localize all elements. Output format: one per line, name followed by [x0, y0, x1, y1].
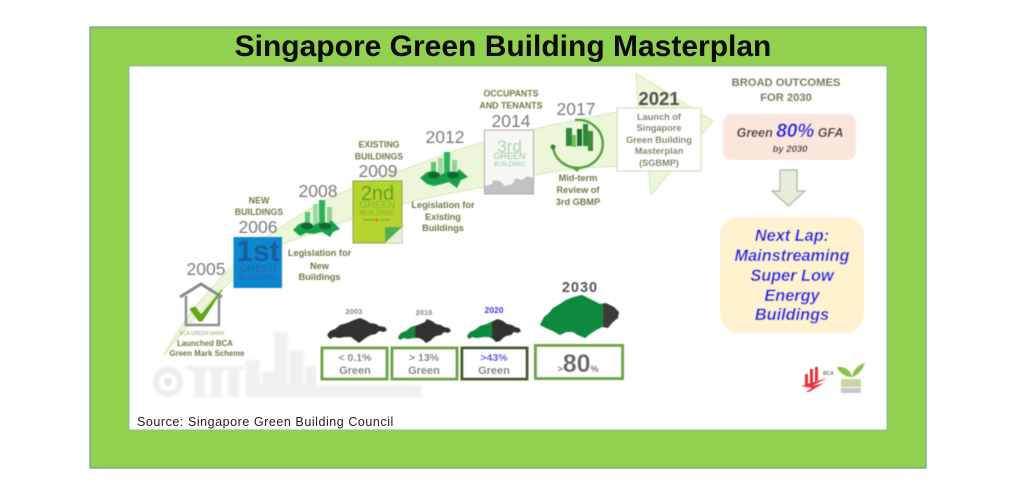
milestone 2006: new buildings: BUILDINGS: [235, 207, 283, 217]
label box < 0.1%: [322, 348, 387, 379]
milestone 2012: legislation for existing buildings: [411, 127, 475, 233]
milestone 2009: existing buildings: EXISTING: [358, 140, 400, 150]
icon: circular green city: [550, 120, 603, 172]
icon: 2nd green building masterplan cover: BUILDING: [360, 208, 395, 217]
icon: green city cluster: [293, 200, 340, 237]
icon: green city cluster: [420, 152, 468, 188]
map 2010: [392, 308, 457, 379]
title: Singapore Green Building Masterplan: [235, 30, 771, 63]
icon: 3rd green building masterplan cover: [484, 130, 534, 194]
milestone 2005: BCA Green Mark: 2005: [187, 259, 225, 279]
milestone 2009: existing buildings: [353, 140, 403, 243]
heading: broad outcomes: FOR 2030: [760, 92, 812, 104]
callout: green 80% GFA: Green 80% GFA: [737, 121, 843, 142]
milestone 2012: legislation for existing buildings: Existing: [425, 212, 461, 222]
icon: green mark house: [180, 284, 222, 325]
map 2003: 2003: [346, 307, 362, 316]
heading: broad outcomes: [732, 77, 841, 104]
broad outcomes panel: [720, 77, 864, 333]
timeline arrow band: [163, 73, 713, 356]
icon: 3rd green building masterplan cover: BUILDING: [494, 161, 525, 168]
map 2020: [462, 305, 527, 379]
callout: next lap: Mainstreaming: [735, 247, 850, 265]
callout: next lap: Buildings: [755, 306, 829, 324]
milestone 2017: mid-term review: Mid-term: [559, 173, 597, 183]
milestone 2006: new buildings: [234, 196, 283, 288]
milestone 2005: BCA Green Mark: Launched BCA: [177, 339, 233, 348]
milestone 2017: mid-term review: 3rd GBMP: [556, 197, 600, 207]
milestone 2012: legislation for existing buildings: 2012: [426, 127, 464, 147]
milestone 2005: BCA Green Mark: Green Mark Scheme: [170, 349, 245, 358]
icon: 1st green building masterplan cover: GREEN: [239, 263, 277, 275]
milestone 2012: legislation for existing buildings: Buildings: [422, 223, 464, 233]
callout: launch box: Green Building: [626, 135, 692, 145]
icon: 3rd green building masterplan cover: GREEN: [493, 151, 526, 161]
callout: launch box: Launch of: [637, 112, 682, 122]
icon: 1st green building masterplan cover: BUILDING: [239, 273, 277, 282]
milestone 2008: legislation for new buildings: Legislation for: [288, 248, 352, 258]
icon: 2nd green building masterplan cover: 2nd: [361, 183, 394, 205]
callout: green 80% GFA: by 2030: [773, 144, 808, 155]
heading: broad outcomes: BROAD OUTCOMES: [732, 77, 841, 89]
arrow: down: [772, 170, 805, 206]
milestone 2009: existing buildings: 2009: [359, 161, 397, 181]
icon: 2nd green building masterplan cover: [353, 181, 402, 243]
label box < 0.1%: Green: [339, 365, 371, 377]
callout: next lap: [720, 217, 864, 333]
icon: 3rd green building masterplan cover: 3rd: [497, 137, 522, 156]
label box > 13%: > 13%: [409, 352, 440, 364]
callout: next lap: Next Lap:: [755, 227, 829, 245]
skyline watermark: [156, 332, 421, 397]
green frame: [90, 27, 926, 468]
milestone 2008: legislation for new buildings: 2008: [299, 181, 337, 201]
icon: 1st green building masterplan cover: 1st: [236, 235, 280, 268]
milestone 2006: new buildings: 2006: [239, 217, 277, 237]
callout: launch box: (SGBMP): [639, 158, 679, 168]
milestone 2014: occupants and tenants: 2014: [492, 111, 531, 131]
milestone 2008: legislation for new buildings: Buildings: [299, 272, 340, 282]
map 2003: [322, 307, 387, 379]
milestone 2021: launch of SGBMP: [617, 88, 701, 171]
label box >80%: >80%: [557, 350, 599, 378]
label box > 13%: Green: [408, 365, 440, 377]
logos: BCA and green building: [801, 363, 865, 393]
icon: leaf logo: [837, 363, 865, 393]
icon: 2nd green building masterplan cover: GREEN: [360, 200, 395, 211]
callout: next lap: Energy: [764, 287, 821, 305]
map 2030: [536, 280, 622, 378]
milestone 2008: legislation for new buildings: New: [310, 261, 330, 271]
milestone 2021: launch of SGBMP: 2021: [638, 88, 680, 109]
milestone 2009: existing buildings: BUILDINGS: [355, 152, 403, 162]
callout: launch box: [617, 108, 701, 171]
logos: BCA and green building: BCA: [823, 371, 834, 377]
milestone 2008: legislation for new buildings: [288, 181, 352, 282]
milestone 2014: occupants and tenants: AND TENANTS: [479, 100, 543, 110]
callout: launch box: Masterplan: [635, 146, 684, 156]
callout: green 80% GFA: [723, 114, 856, 160]
icon: BCA logo: [801, 367, 827, 392]
map 2030: 2030: [562, 280, 598, 296]
icon: 1st green building masterplan cover: [234, 235, 282, 288]
callout: next lap: Super Low: [750, 267, 835, 285]
milestone 2012: legislation for existing buildings: Legislation for: [411, 200, 475, 210]
milestone 2014: occupants and tenants: OCCUPANTS: [483, 88, 539, 98]
milestone 2014: occupants and tenants: [479, 88, 543, 194]
milestone 2005: BCA Green Mark: [170, 259, 245, 358]
source note: Source: Singapore Green Building Council: [137, 415, 394, 429]
map 2020: 2020: [485, 305, 504, 315]
label box >43%: Green: [478, 365, 510, 377]
milestone 2017: mid-term review: Review of: [557, 185, 600, 195]
milestone 2006: new buildings: NEW: [249, 196, 270, 206]
map 2010: 2010: [416, 308, 432, 317]
milestone 2017: mid-term review: [550, 99, 603, 207]
maps and green percentages: [322, 280, 622, 379]
label box >43%: >43%: [480, 352, 508, 364]
label box >43%: [462, 348, 527, 379]
callout: launch box: Singapore: [637, 123, 681, 133]
label box > 13%: [392, 348, 457, 379]
white content panel: [129, 66, 887, 430]
milestone 2005: BCA Green Mark: BCA GREEN MARK: [179, 331, 225, 337]
milestone 2017: mid-term review: 2017: [557, 99, 595, 119]
label box < 0.1%: < 0.1%: [339, 352, 372, 364]
